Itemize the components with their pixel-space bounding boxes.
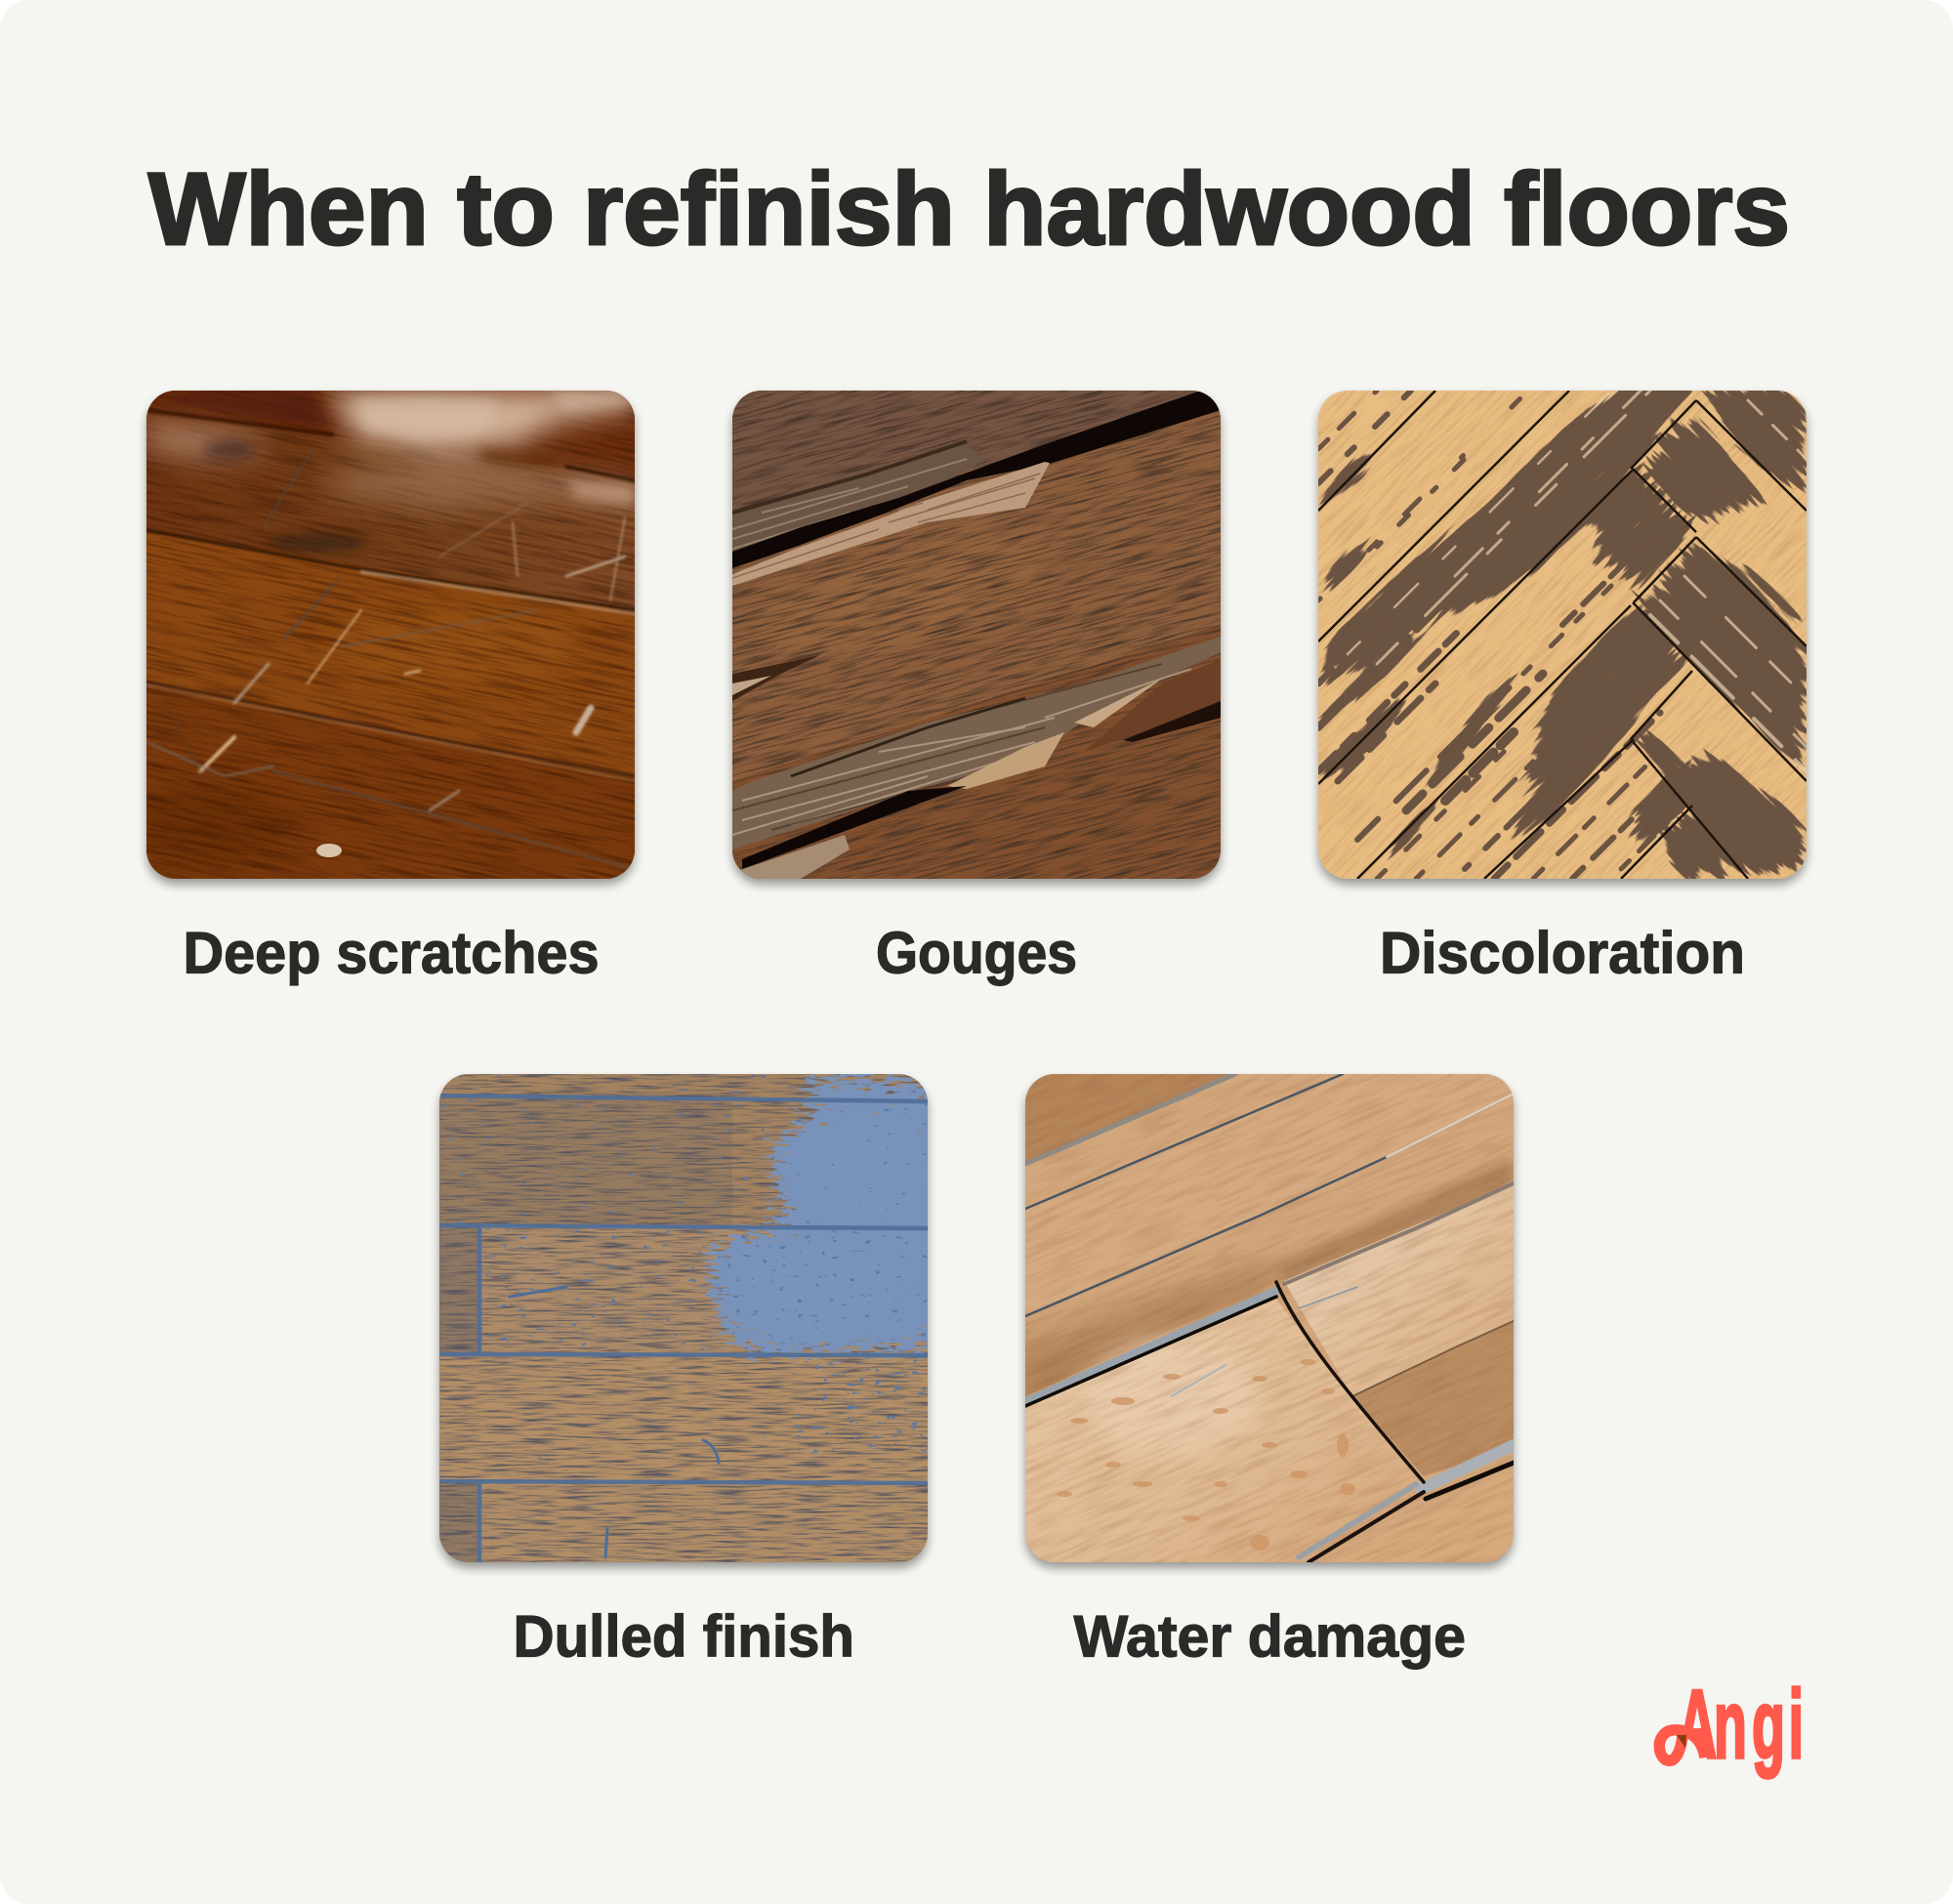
panel: discoloration [1312,391,1812,890]
photo: herringbone peeling finish [1318,391,1807,879]
photo: dull blue-worn planks [430,1064,947,1572]
logo swash gap [1655,1734,1700,1763]
logo overlap shadow [1677,1735,1686,1748]
photo shadow [146,396,635,885]
thin peeling streaks along left planks [1318,391,1689,879]
photo shadow [1318,396,1807,885]
photo shadow [1025,1080,1514,1568]
photo: warped planks [1025,1074,1514,1562]
label: water damage: Water damage [1074,1603,1466,1670]
photo shadow [732,396,1221,885]
panel: gouges [727,391,1226,890]
logo swash [1659,1730,1705,1760]
panel: water damage [1019,1074,1519,1574]
photo: scratched glossy floor [146,391,635,879]
label: discoloration: Discoloration [1380,920,1745,986]
label: deep scratches: Deep scratches [184,920,600,986]
label: dulled finish: Dulled finish [514,1603,854,1670]
photo: gouged planks [732,391,1221,879]
thin light streaks on dark bands [1348,361,1807,771]
logo wordmark: Angi [1678,1671,1804,1779]
panel: dulled finish [430,1064,947,1572]
logo: Angi [1655,1671,1804,1779]
panel: deep scratches [141,391,641,890]
label: gouges: Gouges [876,920,1077,986]
photo shadow [439,1080,928,1568]
title: When to refinish hardwood floors [148,152,1790,267]
